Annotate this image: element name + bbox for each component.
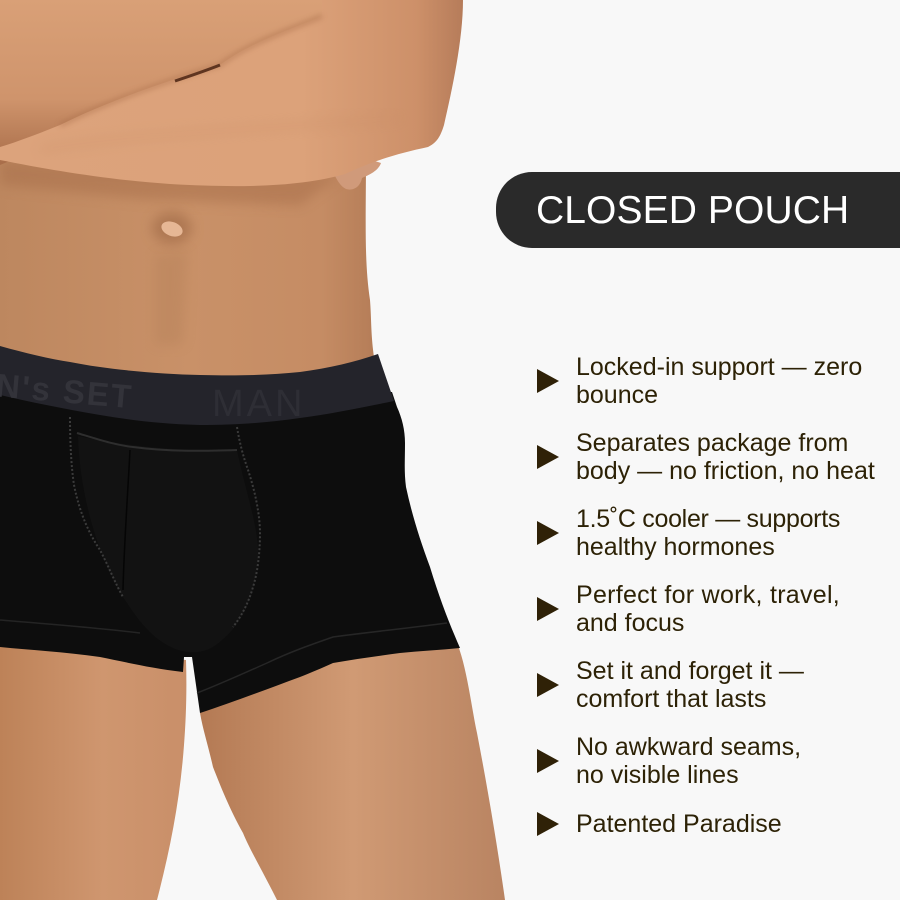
item: no awkward seams: No awkward seams, bbox=[576, 733, 801, 761]
forearm bbox=[0, 0, 463, 186]
waistband logo text right: MAN bbox=[212, 383, 305, 425]
item: patented paradise: Patented Paradise bbox=[576, 810, 782, 838]
torso bbox=[0, 150, 378, 380]
item: cooler: 1.5˚C cooler — supports bbox=[576, 505, 840, 533]
black trunks bbox=[0, 346, 460, 713]
pouch panel bbox=[78, 436, 258, 652]
item: locked-in support: bounce bbox=[576, 381, 658, 409]
item: locked-in support: Locked-in support — zero bbox=[576, 353, 862, 381]
heading pill bbox=[496, 172, 900, 248]
item: work, travel, focus: and focus bbox=[576, 609, 684, 637]
item: cooler: healthy hormones bbox=[576, 533, 775, 561]
photo: model wearing black trunks bbox=[0, 0, 505, 900]
item: cooler bbox=[537, 505, 840, 561]
item: set it and forget it: Set it and forget it — bbox=[576, 657, 804, 685]
item: separates package: body — no friction, no heat bbox=[576, 457, 875, 485]
item: work, travel, focus: Perfect for work, travel, bbox=[576, 581, 840, 609]
left thigh bbox=[0, 640, 186, 900]
item: set it and forget it bbox=[537, 657, 804, 713]
upper arm bbox=[0, 0, 330, 165]
right thigh bbox=[200, 630, 505, 900]
item: no awkward seams: no visible lines bbox=[576, 761, 739, 789]
hand fingers bbox=[333, 160, 381, 190]
item: separates package bbox=[537, 429, 875, 485]
item: no awkward seams bbox=[537, 733, 801, 789]
waistband bbox=[0, 346, 394, 425]
item: locked-in support bbox=[537, 353, 862, 409]
item: work, travel, focus bbox=[537, 581, 840, 637]
item: set it and forget it: comfort that lasts bbox=[576, 685, 766, 713]
heading pill: CLOSED POUCH bbox=[536, 189, 849, 232]
item: separates package: Separates package from bbox=[576, 429, 848, 457]
